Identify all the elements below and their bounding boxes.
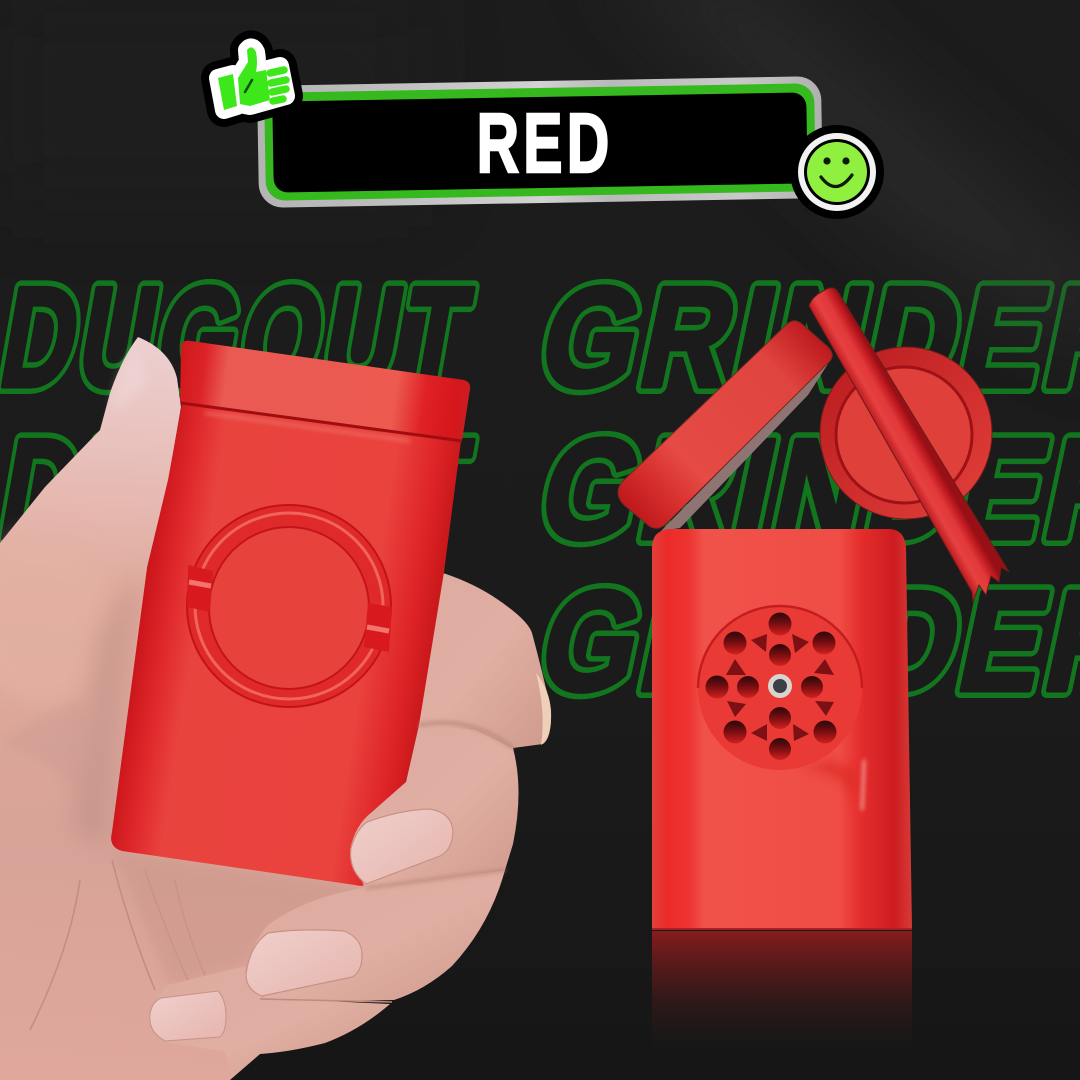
left device: red case [111, 341, 470, 886]
sticker white outline [218, 47, 286, 110]
icon: smiley [790, 125, 884, 219]
hand holding device: palm and thumb [0, 337, 400, 1080]
hinged lid [618, 321, 832, 528]
grinder teeth [726, 634, 834, 741]
right device: open grinder [618, 288, 1009, 1056]
grinder plate [698, 606, 862, 770]
centre pin [768, 674, 792, 698]
thumb finger bars [270, 70, 286, 101]
outlined background words: outer green layer: DUGOUT [0, 410, 485, 569]
case lid [180, 341, 470, 441]
grinder holes [706, 612, 836, 760]
banner label: RED [477, 97, 613, 191]
case ring with grinder disc [186, 504, 392, 708]
fingernail: ring [246, 930, 362, 996]
one-hitter tube [809, 288, 1009, 602]
banner silver frame [257, 76, 823, 208]
case seam [181, 403, 462, 441]
sticker black outline [218, 47, 286, 110]
disc lid [820, 347, 992, 519]
floor reflection [652, 931, 912, 1056]
outlined background words: outer green layer: DUGOUT [0, 258, 485, 417]
fingernail: middle [351, 809, 453, 884]
icon: thumbs up [218, 47, 286, 110]
hand fingers over the case [150, 723, 518, 1075]
outlined background words: inner dark layer: DUGOUT [0, 410, 485, 569]
hand index finger [400, 560, 551, 748]
outlined background words: inner dark layer [0, 258, 1080, 721]
little finger [151, 966, 390, 1075]
lid underside [661, 356, 833, 531]
outlined background words: inner dark layer: DUGOUT [0, 258, 485, 417]
background light streaks [0, 0, 1080, 360]
fingernail: little [150, 991, 226, 1041]
case body [111, 403, 461, 886]
outlined background words: outer green layer [0, 258, 1080, 721]
ring finger [245, 870, 505, 1002]
thumb green shape [218, 47, 270, 110]
banner green frame [264, 83, 816, 201]
main body [652, 529, 912, 929]
banner black plate [272, 92, 808, 193]
middle finger [350, 725, 518, 888]
colour banner [257, 76, 823, 208]
